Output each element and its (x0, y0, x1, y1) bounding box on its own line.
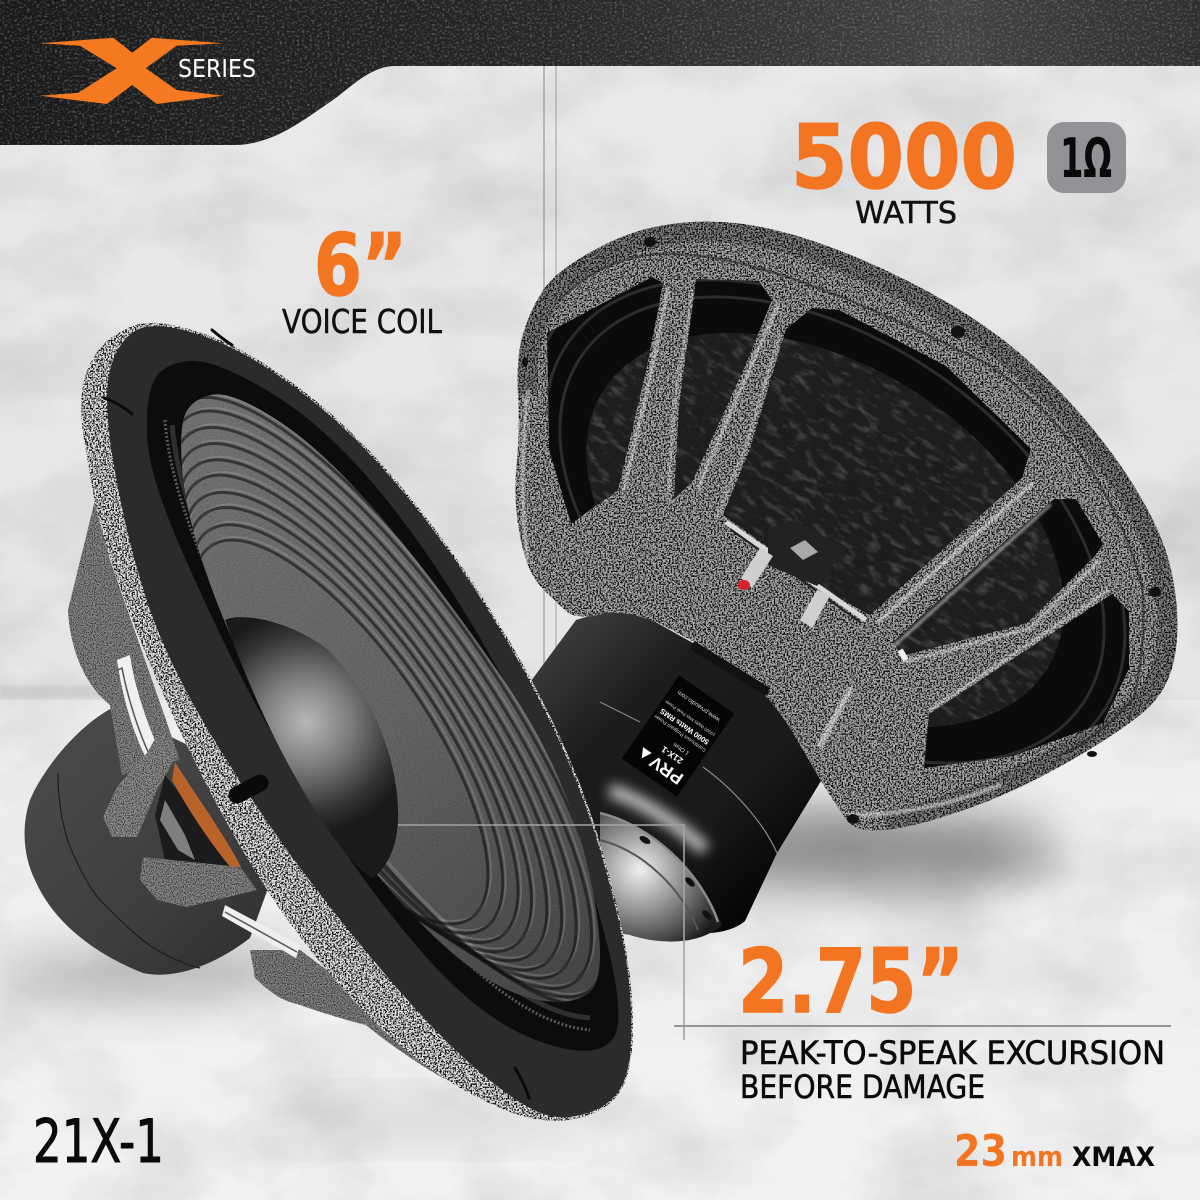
number: 2.75 inch: 2.75” (738, 930, 964, 1033)
rear rim shading (518, 222, 1177, 830)
xmax spec: 23 (954, 1126, 1007, 1177)
icon: orange X mark (40, 38, 223, 104)
gasket tabs (104, 330, 529, 1098)
speaker terminals (738, 520, 846, 628)
front speaker magnet (25, 708, 300, 975)
logo label: SERIES: SERIES (178, 54, 256, 83)
magnet label: 5000 Watts RMS (658, 706, 711, 747)
magnet label: www.prvaudio.com (677, 689, 722, 723)
power rating 5000 watts (791, 106, 1017, 231)
xmax spec: XMAX (1072, 1142, 1155, 1173)
reflective ring (117, 655, 300, 958)
cone concentric rings (181, 394, 596, 1002)
number: 6 inch: 6” (314, 216, 407, 316)
basket spokes (103, 730, 257, 907)
excursion spec: BEFORE DAMAGE (740, 1068, 985, 1106)
rim ridge line (560, 254, 1143, 756)
xmax spec (954, 1126, 1155, 1177)
front surround (147, 361, 618, 1051)
number: 5000: 5000 (791, 106, 1017, 209)
basket collar bracket (692, 645, 768, 692)
rear speaker windows (547, 277, 1129, 768)
impedance badge: 1Ω (1060, 127, 1112, 190)
magnet label: 1 Ohm (673, 741, 691, 756)
rear speaker basket and rim (515, 222, 1177, 831)
description text: PEAK-TO-SPEAK EXCURSION (740, 1034, 1165, 1072)
magnet label: 10000 Watts Max Peak Power (664, 699, 716, 738)
label: VOICE COIL: VOICE COIL (282, 302, 443, 341)
magnet label: 21X-1 (659, 744, 685, 766)
front cone (181, 394, 600, 1002)
magnet label (622, 675, 734, 797)
front speaker basket back (68, 500, 180, 775)
impedance badge (1047, 122, 1126, 193)
magnet label: PRV▲ (632, 742, 687, 788)
front view speaker (25, 323, 691, 1121)
X Series logo (40, 38, 256, 104)
leader line from dust cap to excursion figure (398, 825, 684, 1040)
front gasket ring (107, 326, 631, 1117)
excursion spec (738, 930, 1165, 1106)
rear speaker magnet (525, 605, 821, 942)
top dark textured banner (0, 0, 1200, 146)
front rim silver ring (81, 323, 633, 1121)
reflective ring below cone (726, 522, 906, 660)
label: WATTS: WATTS (855, 196, 957, 231)
rim mounting holes (522, 237, 1161, 824)
voice coil spec (282, 216, 443, 341)
model name: 21X-1 (33, 1107, 164, 1177)
magnet label: Continuous Program Power (653, 713, 707, 753)
dust cap (225, 617, 398, 878)
divider line under excursion figure (674, 1025, 1171, 1027)
front basket lower section (250, 950, 443, 1078)
rust orange strip and inner (155, 762, 241, 868)
rear cone back (586, 333, 1062, 727)
rear view speaker (515, 222, 1178, 942)
basket spoke highlights (523, 290, 1108, 815)
surround roll ridges (165, 420, 590, 1030)
xmax spec: mm (1011, 1140, 1063, 1173)
